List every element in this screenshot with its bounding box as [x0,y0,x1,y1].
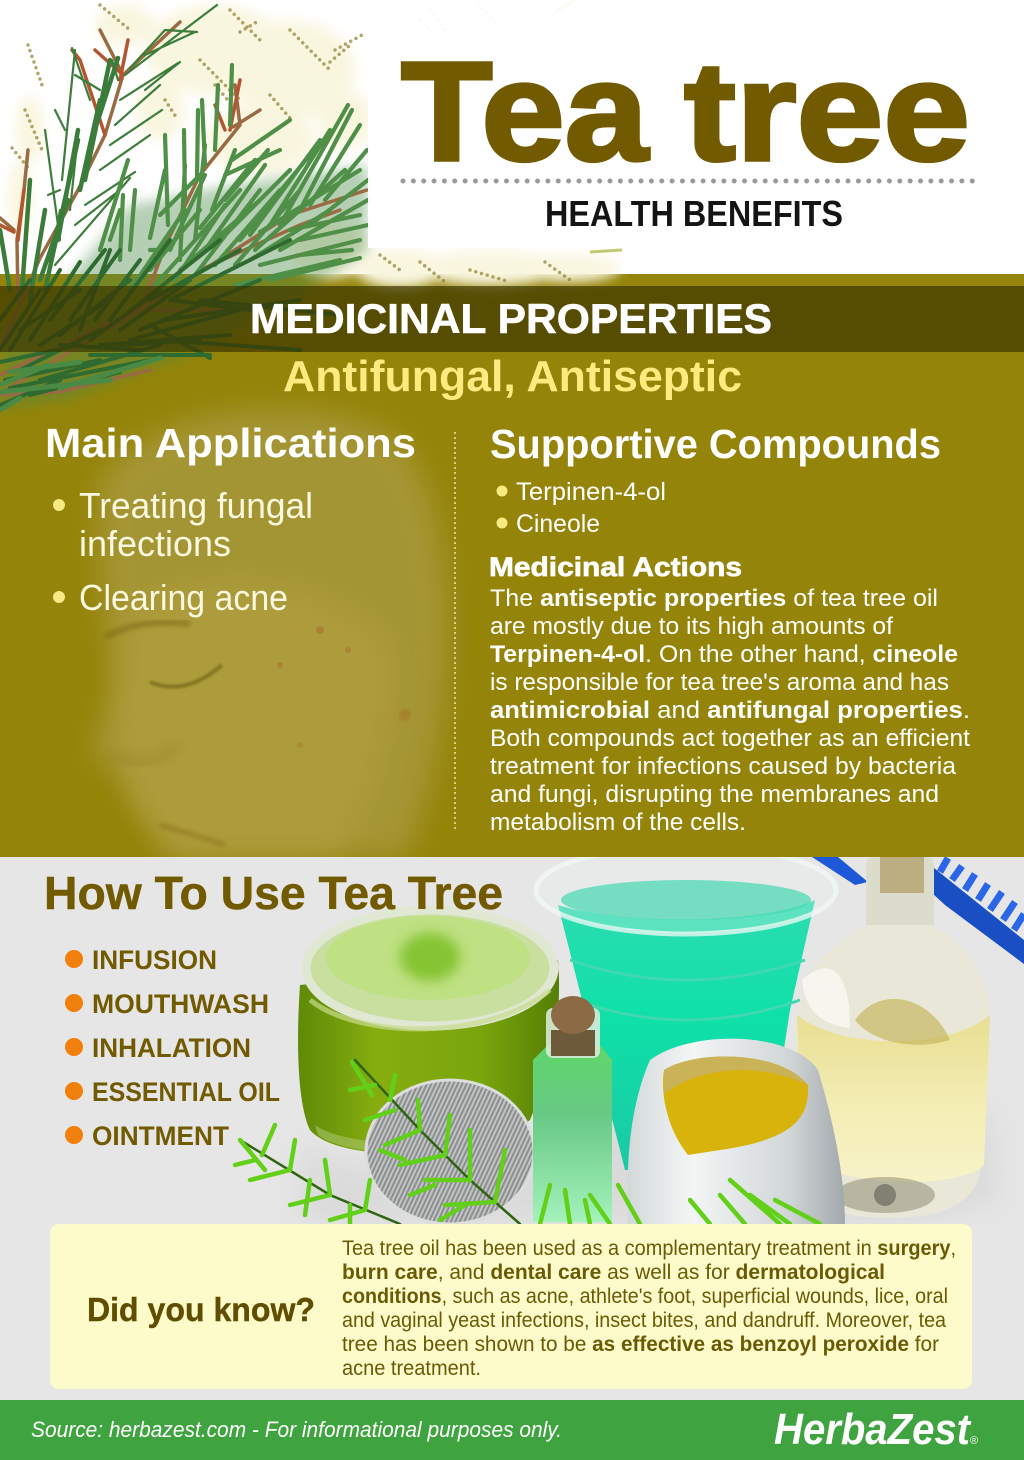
icon: jar of ointment [298,910,559,1153]
icon: blue comb [812,857,1024,964]
text: did you know: burn care, and dental care as well as for dermatological [342,1261,885,1284]
band: medicinal properties [0,286,1024,352]
text: did you know: Tea tree oil has been used as a complementary treatment in surgery, [342,1237,956,1260]
heading: main applications: Main Applications [45,420,416,466]
heading: medicinal actions: Medicinal Actions [489,552,742,582]
list: compounds: Cineole [516,510,600,538]
list: uses: ESSENTIAL OIL [92,1077,280,1107]
text: medicinal actions [490,585,970,836]
title [401,32,970,190]
list: uses: INFUSION [92,945,217,975]
icon: tea strainer [366,1080,534,1224]
panel: did you know [50,1224,972,1389]
text: medicinal actions: metabolism of the cells. [490,809,746,836]
flower blossoms [8,0,622,288]
text: did you know: acne treatment. [342,1357,481,1380]
registered mark: ® [970,1435,978,1447]
heading: antifungal antiseptic: Antifungal, Antiseptic [283,352,742,401]
text: did you know: tree has been shown to be as effective as benzoyl peroxide for [342,1333,939,1356]
product photo group [235,846,1024,1226]
heading: supportive compounds: Supportive Compounds [490,421,941,467]
list: applications: Clearing acne [79,577,288,618]
subtitle: HEALTH BENEFITS [545,193,843,234]
list: applications: infections [79,523,231,564]
text: medicinal actions: Both compounds act together as an efficient [490,725,970,752]
text: medicinal actions: are mostly due to its high amounts of [490,613,893,640]
list: uses [65,945,280,1151]
list: uses: OINTMENT [92,1121,229,1151]
footer [0,1400,1024,1460]
text: medicinal actions: treatment for infections caused by bacteria [490,753,957,780]
text: medicinal actions: is responsible for tea tree's aroma and has [490,669,949,696]
list: applications: Treating fungal [79,485,313,526]
panel: main applications [45,420,416,618]
title: Tea [401,32,650,190]
icon: glass bottle of oil [795,857,990,1218]
text: did you know: conditions, such as acne, athlete's foot, superficial wounds, lice, oral [342,1285,948,1308]
list: uses: MOUTHWASH [92,989,269,1019]
column divider [454,433,456,832]
list: applications [53,485,313,618]
icon: plastic cup of mouthwash [536,846,836,1170]
tea tree branch [0,5,368,410]
source note: Source: herbazest.com - For informational purposes only. [31,1417,562,1442]
face image [93,409,449,857]
icon: tea tree sprigs [235,1060,820,1224]
soft shadows [306,1126,990,1218]
panel: how to use [0,846,1024,1400]
panel: medicinal properties background [0,274,1024,857]
text: medicinal actions: antimicrobial and antifungal properties . [490,697,970,724]
text: medicinal actions: The antiseptic properties of tea tree oil [490,585,938,612]
icon: white pitcher [627,1039,845,1226]
icon: small vial with cork [533,996,612,1222]
list: compounds [496,478,666,538]
text: medicinal actions: Terpinen-4-ol. On the other hand, cineole [490,641,958,668]
text: medicinal actions: and fungi, disrupting the membranes and [490,781,939,808]
text: did you know: and vaginal yeast infections, insect bites, and dandruff. Moreover, tea [342,1309,946,1332]
dotted divider [403,178,975,184]
title: tree [684,32,970,190]
heading: did you know: Did you know? [87,1291,315,1328]
list: uses: INHALATION [92,1033,251,1063]
title panel: white backing [368,0,1024,248]
list: compounds: Terpinen-4-ol [516,478,666,506]
text: did you know [342,1237,956,1380]
logo: HerbaZest: HerbaZest [774,1405,972,1454]
heading: medicinal properties: MEDICINAL PROPERTIES [250,295,772,342]
panel: supportive compounds [489,421,970,836]
heading: how to use: How To Use Tea Tree [44,867,503,919]
